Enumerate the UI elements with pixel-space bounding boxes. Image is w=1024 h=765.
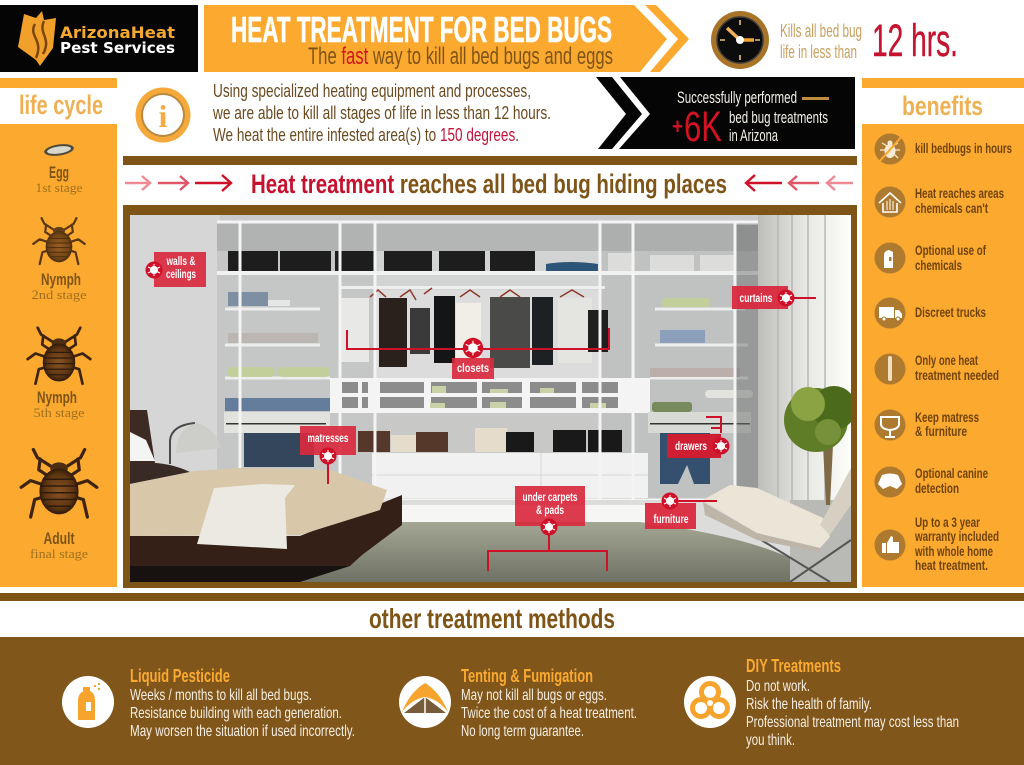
icon: info: i <box>159 98 168 134</box>
glass left tint <box>217 221 375 503</box>
intro text <box>212 80 551 145</box>
heading: life cycle: life cycle <box>19 90 103 120</box>
benefit: keep furniture: & furniture <box>915 424 967 439</box>
arrows: left <box>125 175 231 191</box>
stage: nymph 5th: 5th stage <box>34 406 85 420</box>
label: walls and ceilings: ceilings <box>166 269 196 281</box>
label: furniture: furniture <box>654 514 688 526</box>
method: liquid pesticide: Weeks / months to kill all bed bugs. <box>130 687 312 704</box>
method: liquid pesticide: May worsen the situation if used incorrectly. <box>130 723 355 740</box>
stage: egg: Egg <box>49 163 69 182</box>
title: HEAT TREATMENT FOR BED BUGS <box>231 9 612 50</box>
label: matresses <box>300 426 356 484</box>
method: tenting and fumigation: Twice the cost of a heat treatment. <box>461 705 637 722</box>
logo text: Pest Services <box>60 39 175 57</box>
label: walls and ceilings <box>146 252 206 287</box>
stage: egg: 1st stage <box>36 181 83 195</box>
benefit: warranty: heat treatment. <box>915 558 988 573</box>
method: liquid pesticide: Liquid Pesticide <box>130 666 230 686</box>
benefit: trucks <box>874 298 986 328</box>
stage: nymph 2nd: 2nd stage <box>32 288 87 302</box>
panel: treatments performed: bed bug treatments <box>729 108 828 127</box>
panel: treatments performed: Successfully performed <box>677 88 797 107</box>
method: DIY treatments <box>684 656 959 749</box>
glass right tint <box>600 221 758 503</box>
intro text: we are able to kill all stages of life in less than 12 hours. <box>212 102 551 123</box>
hanging clothes <box>340 288 608 368</box>
title banner <box>204 5 689 72</box>
lamp <box>170 423 221 464</box>
method: tenting and fumigation: No long term guarantee. <box>461 723 584 740</box>
icon: spray can <box>62 676 114 728</box>
rug <box>200 522 817 582</box>
panel: treatments performed: 6K <box>684 103 722 151</box>
label: drawers <box>667 417 730 458</box>
heading: benefits: benefits <box>902 91 983 121</box>
stage: nymph 2nd: Nymph <box>41 270 81 289</box>
benefit: canine: detection <box>915 481 959 496</box>
kill time callout: Kills all bed bug <box>780 20 862 41</box>
label: matresses: matresses <box>308 433 348 445</box>
label: curtains: curtains <box>740 293 772 305</box>
icon: flame state logo <box>18 11 56 66</box>
stage: adult: Adult <box>44 529 75 548</box>
method: DIY treatments: DIY Treatments <box>746 656 841 676</box>
stage: adult: final stage <box>30 547 89 561</box>
cubby shelves <box>330 378 650 413</box>
benefit: warranty <box>874 515 999 573</box>
white drawers <box>372 453 648 498</box>
logo panel <box>0 5 198 72</box>
panel: life cycle <box>0 78 117 587</box>
panel: treatments performed <box>596 77 855 151</box>
heading: other treatment methods <box>0 593 1024 634</box>
method: DIY treatments: Risk the health of family. <box>746 696 872 713</box>
stage: adult <box>21 450 97 561</box>
benefit: trucks: Discreet trucks <box>915 305 986 320</box>
icon: info <box>136 88 190 142</box>
stage: nymph 5th: Nymph <box>37 388 77 407</box>
panel: treatments performed: + <box>672 114 683 139</box>
stage: nymph 2nd <box>32 218 87 302</box>
label: closets <box>347 328 609 379</box>
benefit: keep furniture: Keep matress <box>915 410 979 425</box>
method: tenting and fumigation: Tenting & Fumigation <box>461 666 593 686</box>
kill time callout <box>780 15 958 66</box>
benefit: warranty: Up to a 3 year <box>915 515 981 530</box>
icon: biohazard <box>684 676 736 728</box>
intro text: Using specialized heating equipment and processes, <box>213 80 531 101</box>
benefit: chemicals: chemicals <box>915 258 962 273</box>
intro text: We heat the entire infested area(s) to 150 degrees. <box>213 124 519 145</box>
panel: treatments performed: in Arizona <box>729 126 778 145</box>
benefit: heat reaches: chemicals can't <box>915 201 988 216</box>
benefit: chemicals: Optional use of <box>915 243 986 258</box>
method: DIY treatments: you think. <box>746 732 795 749</box>
stage: egg <box>36 142 83 195</box>
method: DIY treatments: Do not work. <box>746 678 810 695</box>
plant <box>784 386 856 505</box>
stage: nymph 5th <box>28 328 90 420</box>
kill time callout: life in less than <box>780 41 857 62</box>
label: walls and ceilings: walls & <box>166 256 196 268</box>
icon: clock <box>711 11 769 69</box>
heading text: Heat treatment reaches all bed bug hiding places <box>251 169 727 199</box>
label: curtains <box>732 286 816 309</box>
headboard and pillows <box>130 410 190 484</box>
method: liquid pesticide: Resistance building with each generation. <box>130 705 342 722</box>
benefit: chemicals <box>874 242 986 274</box>
label: closets: closets <box>457 363 489 375</box>
handbags <box>358 431 448 452</box>
benefit: canine <box>874 466 988 498</box>
storage boxes <box>228 251 535 271</box>
benefit: one treatment: Only one heat <box>915 353 978 368</box>
left shelves and folded clothes <box>224 292 330 467</box>
panel: bedroom illustration <box>123 205 857 588</box>
method: liquid pesticide <box>62 666 355 740</box>
logo text <box>60 23 175 57</box>
wardrobe interior <box>217 221 758 503</box>
method: tenting and fumigation <box>399 666 637 740</box>
kill time callout: 12 hrs. <box>872 15 958 66</box>
benefit: kill bedbugs <box>874 134 1012 164</box>
icon: tent <box>399 676 451 728</box>
arrows: right <box>746 175 853 191</box>
floor <box>372 500 770 582</box>
panel: benefits <box>862 78 1024 587</box>
label: under carpets and pads: under carpets <box>522 492 578 504</box>
curtains <box>758 215 851 505</box>
logo text: ArizonaHeat <box>60 23 175 42</box>
lounge chair <box>703 468 851 582</box>
heading: other treatment methods: other treatment methods <box>369 603 615 634</box>
panel: other treatment methods <box>0 637 1024 765</box>
bed <box>130 468 402 582</box>
label: under carpets and pads <box>488 486 607 571</box>
benefit: warranty: with whole home <box>914 544 993 559</box>
method: tenting and fumigation: May not kill all bugs or eggs. <box>461 687 607 704</box>
right shelves and folded clothes <box>648 225 758 500</box>
heading band: hiding places <box>123 156 857 215</box>
benefit: canine: Optional canine <box>915 466 988 481</box>
subtitle: The fast way to kill all bed bugs and eggs <box>308 43 613 70</box>
door frames <box>217 222 760 500</box>
benefit: one treatment <box>874 353 999 384</box>
label: furniture <box>645 492 717 529</box>
label: drawers: drawers <box>675 441 707 453</box>
label: under carpets and pads: & pads <box>536 505 564 517</box>
benefit: heat reaches <box>874 186 1004 218</box>
benefit: keep furniture <box>874 410 979 440</box>
